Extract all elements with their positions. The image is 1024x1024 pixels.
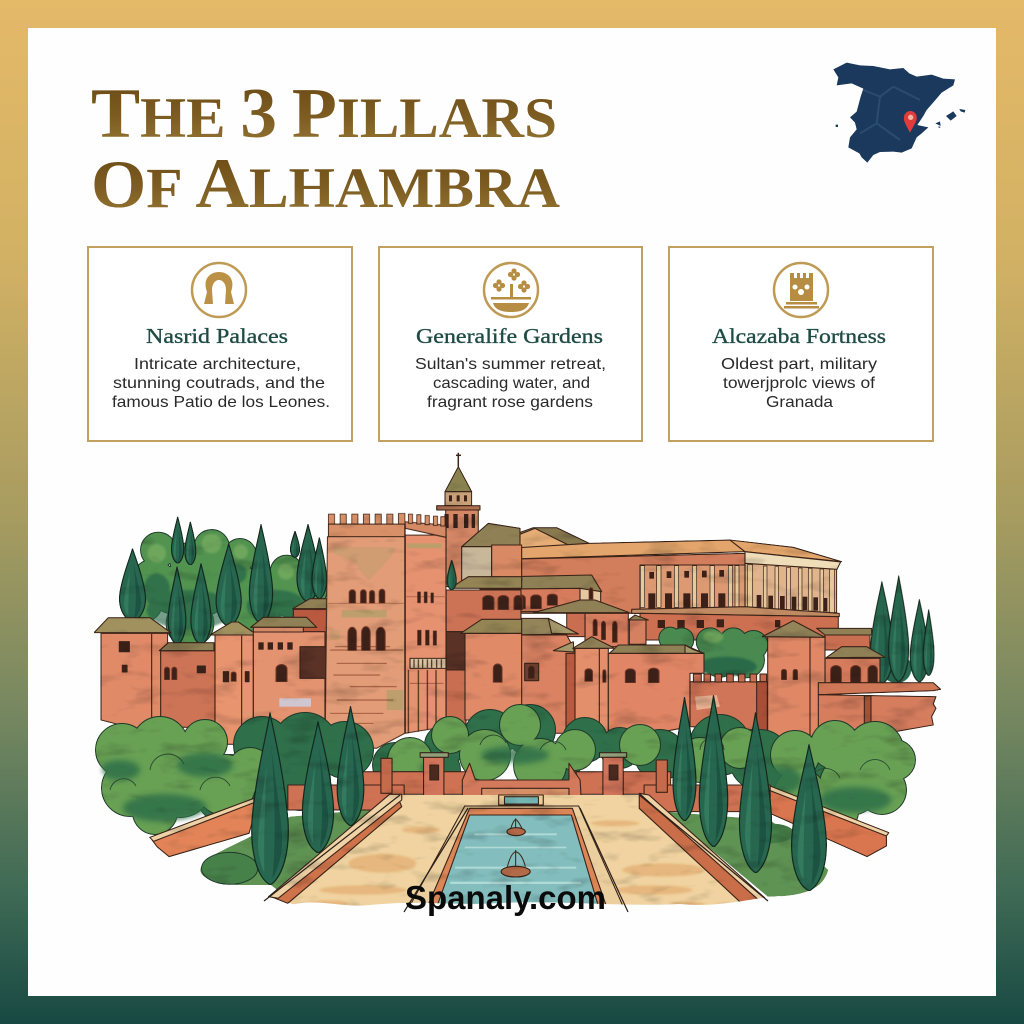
crenellated wall xyxy=(690,682,767,743)
fourth block xyxy=(251,617,327,738)
card: Alcazaba Fortness xyxy=(669,247,933,441)
arcaded hall xyxy=(480,588,580,612)
description: Alcazaba Fortness: towerjprolc views of xyxy=(723,375,876,392)
palace of Charles V and right-hand buildings xyxy=(480,528,941,748)
description: Generalife Gardens xyxy=(415,356,606,411)
description: Nasrid Palaces: famous Patio de los Leones. xyxy=(112,394,330,411)
icon: horseshoe arch xyxy=(192,263,246,317)
heading: Nasrid Palaces: Nasrid Palaces xyxy=(146,324,288,348)
inner planter walls xyxy=(268,793,769,907)
right background cypresses xyxy=(870,576,934,684)
illustration: Alhambra complex and gardens xyxy=(94,453,941,925)
formal garden court xyxy=(150,753,889,913)
description: Generalife Gardens: Sultan's summer retreat, xyxy=(415,356,606,373)
heading: Generalife Gardens: Generalife Gardens xyxy=(416,324,603,348)
low east wall xyxy=(818,683,941,695)
reflecting pool with fountains xyxy=(408,795,625,910)
second block xyxy=(159,643,215,727)
main keep tower xyxy=(325,513,456,748)
watermark: Spanaly.com: Spanaly.com xyxy=(405,879,606,916)
description: Nasrid Palaces: stunning coutrads, and the xyxy=(113,375,325,392)
outer planter walls xyxy=(150,786,889,857)
description: Generalife Gardens: fragrant rose gardens xyxy=(427,394,593,411)
description: Nasrid Palaces xyxy=(112,356,330,411)
description: Alcazaba Fortness xyxy=(721,356,877,411)
description: Alcazaba Fortness: Granada xyxy=(766,394,833,411)
icon: garden flowers in a basin xyxy=(484,263,538,317)
Alhambra west towers and keep xyxy=(94,453,523,748)
right buildings and tower xyxy=(825,635,870,650)
palace link wing xyxy=(446,577,523,732)
front palace block xyxy=(480,635,575,733)
title: OF ALHAMBRA xyxy=(91,145,560,223)
back garden wall xyxy=(288,753,770,812)
description: Alcazaba Fortness: Oldest part, military xyxy=(721,356,877,373)
church tower xyxy=(437,453,522,587)
left tower xyxy=(94,618,171,730)
title xyxy=(91,75,560,223)
pool edge ink lines xyxy=(264,795,768,912)
lawns xyxy=(200,807,828,897)
card: Generalife Gardens xyxy=(379,247,642,441)
middle garden behind wall xyxy=(659,628,767,677)
description: Generalife Gardens: cascading water, and xyxy=(433,375,590,392)
description: Nasrid Palaces: Intricate architecture, xyxy=(134,356,301,373)
paper edge below the scene xyxy=(290,896,790,925)
third tower xyxy=(210,622,257,744)
garden shrubs xyxy=(96,705,915,834)
icon: fortress tower xyxy=(774,263,828,317)
map of Spain with location pin xyxy=(833,63,965,163)
heading: Alcazaba Fortness: Alcazaba Fortness xyxy=(712,324,886,348)
sand walkway xyxy=(271,795,765,913)
title: THE 3 PILLARS xyxy=(91,75,557,153)
card: Nasrid Palaces xyxy=(88,247,352,441)
foreground cypress trees xyxy=(252,696,826,891)
left background trees xyxy=(120,517,327,647)
